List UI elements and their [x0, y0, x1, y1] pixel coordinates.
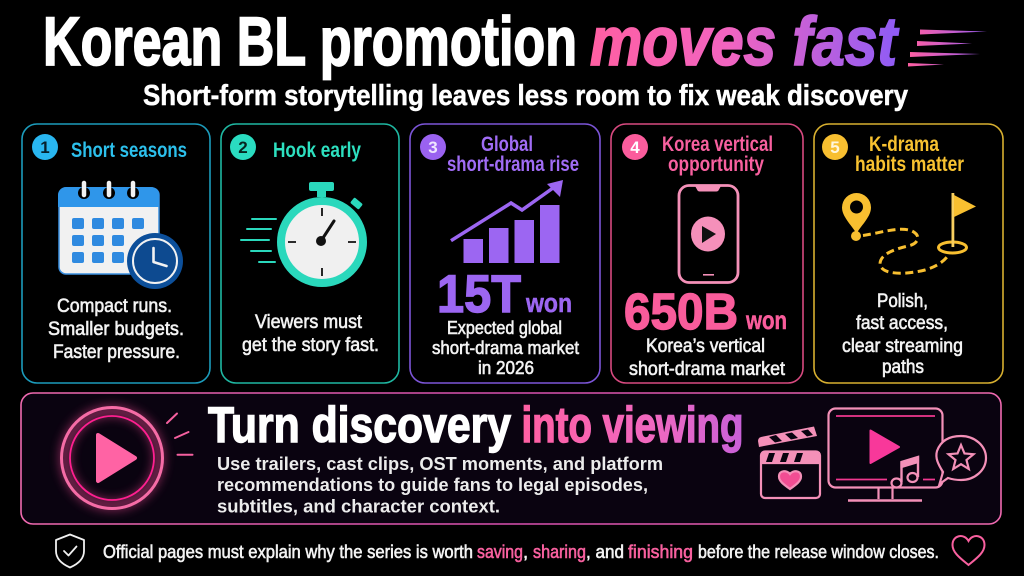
text: global market: [432, 318, 579, 378]
heading: turn discovery into viewing: into viewing: [522, 397, 744, 453]
panel: K-drama habits matter: [814, 124, 1003, 383]
text: call to action: subtitles, and character context.: [217, 496, 500, 516]
heading: global short-drama rise: Global: [481, 133, 533, 156]
text: global market: Expected global: [447, 318, 562, 338]
heading: Korea vertical opportunity: [662, 133, 773, 176]
text: call to action: [217, 453, 663, 516]
footer statement: finishing: [628, 541, 693, 562]
footer statement: saving: [477, 541, 523, 562]
badge 3: [420, 134, 446, 160]
text: global market: in 2026: [478, 358, 534, 378]
text: call to action: recommendations to guide fans to legal episodes,: [217, 474, 648, 495]
text: global market: short-drama market: [432, 338, 579, 358]
icon: route from pin to flag: [842, 193, 976, 273]
subtitle: Short-form storytelling leaves less room to fix weak discovery: [143, 80, 908, 112]
heading: turn discovery into viewing: [208, 397, 744, 453]
heading: Korea vertical opportunity: Korea vertical: [662, 133, 773, 156]
text: K-drama habits: [842, 290, 963, 378]
badge 1: [32, 134, 58, 160]
panel: global short-drama rise: [410, 124, 600, 383]
heading: global short-drama rise: short-drama rise: [447, 153, 579, 176]
badge 1: 1: [40, 138, 50, 157]
text: short seasons: Faster pressure.: [53, 341, 180, 363]
footer statement: sharing: [533, 541, 586, 562]
heading: hook early: Hook early: [273, 139, 361, 162]
icon: speech bubble with star: [936, 436, 986, 484]
panel: Korea vertical opportunity: [611, 124, 803, 383]
text: K-drama habits: clear streaming: [842, 335, 963, 357]
badge 4: [622, 134, 648, 160]
footer statement: ,: [523, 541, 528, 562]
icon: shield with check: [56, 534, 84, 568]
badge 4: 4: [630, 138, 640, 157]
stat: 650B won: won: [745, 305, 787, 335]
heading: global short-drama rise: [447, 133, 579, 176]
badge 2: 2: [238, 138, 248, 157]
text: Korea market: Korea’s vertical: [646, 336, 765, 357]
text: K-drama habits: Polish,: [877, 290, 928, 312]
text: hook early: get the story fast.: [242, 334, 379, 356]
icon: calendar with clock: [58, 183, 183, 289]
footer statement: before the release window closes.: [698, 541, 939, 562]
title: moves fast: [590, 3, 900, 80]
badge 5: 5: [830, 138, 840, 157]
text: short seasons: [48, 295, 184, 363]
text: K-drama habits: fast access,: [856, 312, 948, 334]
heading: K-drama habits matter: habits matter: [855, 153, 964, 176]
stat: 650B won: 650B: [624, 283, 738, 340]
stat: 15T won: won: [525, 288, 572, 318]
text: hook early: Viewers must: [255, 311, 363, 333]
text: K-drama habits: paths: [882, 356, 924, 378]
badge 5: [822, 134, 848, 160]
text: call to action: Use trailers, cast clips, OST moments, and platform: [217, 453, 663, 474]
text: short seasons: Compact runs.: [57, 295, 172, 317]
badge 3: 3: [428, 138, 438, 157]
icon: monitor with play: [828, 408, 942, 500]
title: Korean BL promotion: [43, 3, 577, 80]
footer statement: , and: [586, 541, 624, 562]
text: Korea market: [629, 336, 786, 380]
text: short seasons: Smaller budgets.: [48, 318, 184, 340]
heading: turn discovery into viewing: Turn discovery: [208, 397, 511, 453]
footer statement: [103, 541, 939, 562]
icon: glowing play button: [62, 408, 192, 508]
heading: Korea vertical opportunity: opportunity: [668, 153, 764, 176]
panel: turn discovery into viewing: [21, 393, 1001, 524]
footer statement: Official pages must explain why the series is worth: [103, 541, 473, 562]
icon: clapperboard with heart: [758, 426, 820, 498]
icon: stopwatch: [241, 182, 363, 283]
text: Korea market: short-drama market: [629, 359, 786, 380]
icon: phone with play button: [679, 186, 738, 282]
stat: 15T won: [437, 265, 572, 324]
badge 2: [230, 134, 256, 160]
stat: 15T won: 15T: [437, 265, 521, 324]
icon: music notes: [892, 457, 918, 488]
panel: hook early: [221, 124, 399, 383]
heading: K-drama habits matter: K-drama: [869, 133, 939, 156]
heading: K-drama habits matter: [855, 133, 964, 176]
icon: heart: [952, 536, 984, 565]
panel: short seasons: [22, 124, 210, 383]
icon: speed lines: [908, 30, 987, 66]
bar chart with rising arrow: [451, 180, 563, 263]
text: hook early: [242, 311, 379, 356]
heading: short seasons: Short seasons: [71, 139, 187, 162]
